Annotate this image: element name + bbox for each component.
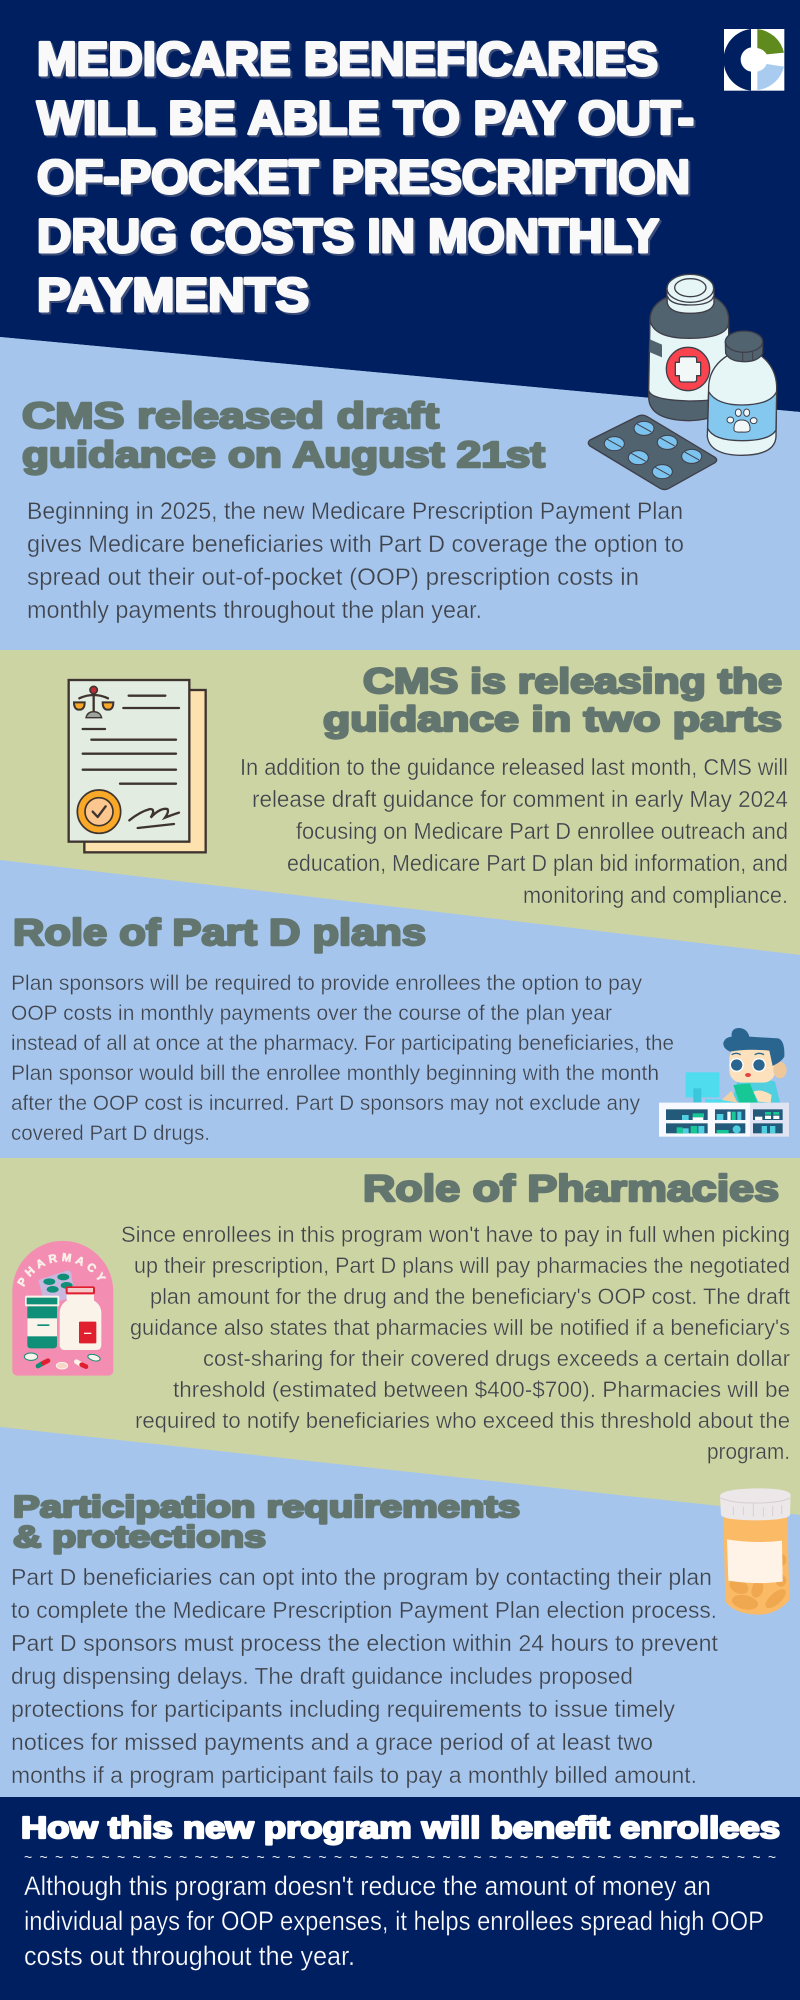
title: PAYMENTS — [37, 268, 309, 321]
icon: pharmacy badge — [12, 1240, 114, 1376]
text block: two-part guidance — [240, 754, 788, 908]
text block: pharmacies: cost-sharing for their covered drugs exceeds a certain dollar — [203, 1346, 790, 1371]
icon: medicine bottles and blister pack — [588, 274, 777, 490]
heading: CMS is releasing the guidance: CMS is releasing the — [363, 662, 782, 701]
title: WILL BE ABLE TO PAY OUT- — [37, 91, 694, 144]
heading: Participation requirements and protections: Participation requirements — [13, 1489, 520, 1524]
heading: CMS released draft guidance: CMS released draft — [22, 395, 439, 436]
text block: draft guidance: gives Medicare beneficiaries with Part D coverage the option to — [27, 531, 684, 558]
text block: pharmacies: program. — [707, 1439, 790, 1464]
title: OF-POCKET PRESCRIPTION — [39, 152, 692, 205]
text block: pharmacies — [121, 1222, 790, 1464]
text block: Part D plans: OOP costs in monthly payments over the course of the plan year — [11, 1001, 612, 1025]
title — [37, 32, 696, 323]
panel: participation background — [0, 1427, 800, 1797]
text block: pharmacies: plan amount for the drug and the beneficiary's OOP cost. The draft — [150, 1284, 790, 1309]
title: DRUG COSTS IN MONTHLY — [37, 209, 659, 262]
heading: CMS is releasing the guidance — [323, 662, 782, 739]
text block: pharmacies: up their prescription, Part D plans will pay pharmacies the negotiated — [134, 1253, 790, 1278]
text block: participation — [11, 1564, 719, 1788]
icon: pharmacy badge: PHARMACY — [16, 1252, 106, 1287]
text block: participation: protections for participants including requirements to issue timely — [11, 1696, 675, 1722]
text block: participation: notices for missed payments and a grace period of at least two — [11, 1729, 653, 1755]
heading: CMS released draft guidance — [22, 395, 545, 475]
panel: two parts background — [0, 650, 800, 955]
text block: Part D plans — [11, 971, 674, 1145]
text block: benefit: Although this program doesn't reduce the amount of money an — [24, 1871, 711, 1901]
text block: Part D plans: covered Part D drugs. — [11, 1121, 210, 1145]
icon: orange pill bottle — [720, 1488, 791, 1615]
icon: legal document — [69, 680, 206, 852]
text block: draft guidance: spread out their out-of-pocket (OOP) prescription costs in — [27, 564, 639, 591]
title: MEDICARE BENEFICARIES — [39, 34, 660, 87]
text block: participation: months if a program participant fails to pay a monthly billed amount. — [11, 1762, 697, 1788]
heading: how this new program will benefit enrollees: How this new program will benefit enrollees — [21, 1810, 780, 1845]
text block: pharmacies: guidance also states that pharmacies will be notified if a beneficiary's — [130, 1315, 790, 1340]
text block: two-part guidance: monitoring and compliance. — [523, 882, 788, 908]
text block: participation: Part D sponsors must process the election within 24 hours to prevent — [11, 1630, 719, 1656]
text block: benefit: costs out throughout the year. — [24, 1941, 355, 1971]
title: MEDICARE BENEFICARIES — [37, 32, 658, 85]
text block: two-part guidance: release draft guidance for comment in early May 2024 — [252, 786, 788, 812]
text block: Part D plans: Plan sponsor would bill the enrollee monthly beginning with the month — [11, 1061, 659, 1085]
text block: two-part guidance: focusing on Medicare Part D enrollee outreach and — [296, 818, 788, 844]
title: PAYMENTS — [39, 270, 311, 323]
heading: Role of Pharmacies: Role of Pharmacies — [363, 1168, 779, 1209]
text block: Part D plans: instead of all at once at the pharmacy. For participating beneficiaries, the — [11, 1031, 674, 1055]
heading: CMS is releasing the guidance: guidance in two parts — [323, 700, 782, 739]
panel: benefit footer background — [0, 1797, 800, 2000]
text block: participation: drug dispensing delays. The draft guidance includes proposed — [11, 1663, 633, 1689]
icon: logo — [724, 29, 784, 91]
panel: pharmacies background — [0, 1158, 800, 1515]
title: OF-POCKET PRESCRIPTION — [37, 150, 690, 203]
panel: draft guidance background — [0, 337, 800, 650]
text block: pharmacies: Since enrollees in this program won't have to pay in full when picking — [121, 1222, 790, 1247]
tilde divider: ~~~~~~~~~~~~~~~~~~~~~~~~~~~~~~~~~~~~~~~~~~~~~~~~~ — [24, 1849, 776, 1865]
text block: pharmacies: required to notify beneficiaries who exceed this threshold about the — [135, 1408, 790, 1433]
heading: Participation requirements and protections: & protections — [13, 1519, 266, 1554]
heading: Role of Part D plans: Role of Part D plans — [13, 912, 426, 953]
icon: pharmacist at counter — [659, 1028, 789, 1137]
heading: CMS released draft guidance: guidance on August 21st — [22, 434, 545, 475]
text block: pharmacies: threshold (estimated between $400-$700). Pharmacies will be — [173, 1377, 790, 1402]
text block: draft guidance: monthly payments throughout the plan year. — [27, 597, 482, 624]
title: WILL BE ABLE TO PAY OUT- — [39, 93, 696, 146]
text block: draft guidance: Beginning in 2025, the new Medicare Prescription Payment Plan — [27, 498, 683, 525]
heading: Participation requirements and protections — [13, 1489, 520, 1554]
text block: participation: to complete the Medicare Prescription Payment Plan election process. — [11, 1597, 717, 1623]
text block: Part D plans: after the OOP cost is incurred. Part D sponsors may not exclude any — [11, 1091, 640, 1115]
text block: benefit — [24, 1871, 764, 1971]
panel: header background — [0, 0, 800, 412]
title: DRUG COSTS IN MONTHLY — [39, 211, 661, 264]
text block: Part D plans: Plan sponsors will be required to provide enrollees the option to pay — [11, 971, 642, 995]
text block: draft guidance — [27, 498, 684, 624]
panel: Part D plans background — [0, 860, 800, 1158]
text block: participation: Part D beneficiaries can opt into the program by contacting their plan — [11, 1564, 712, 1590]
